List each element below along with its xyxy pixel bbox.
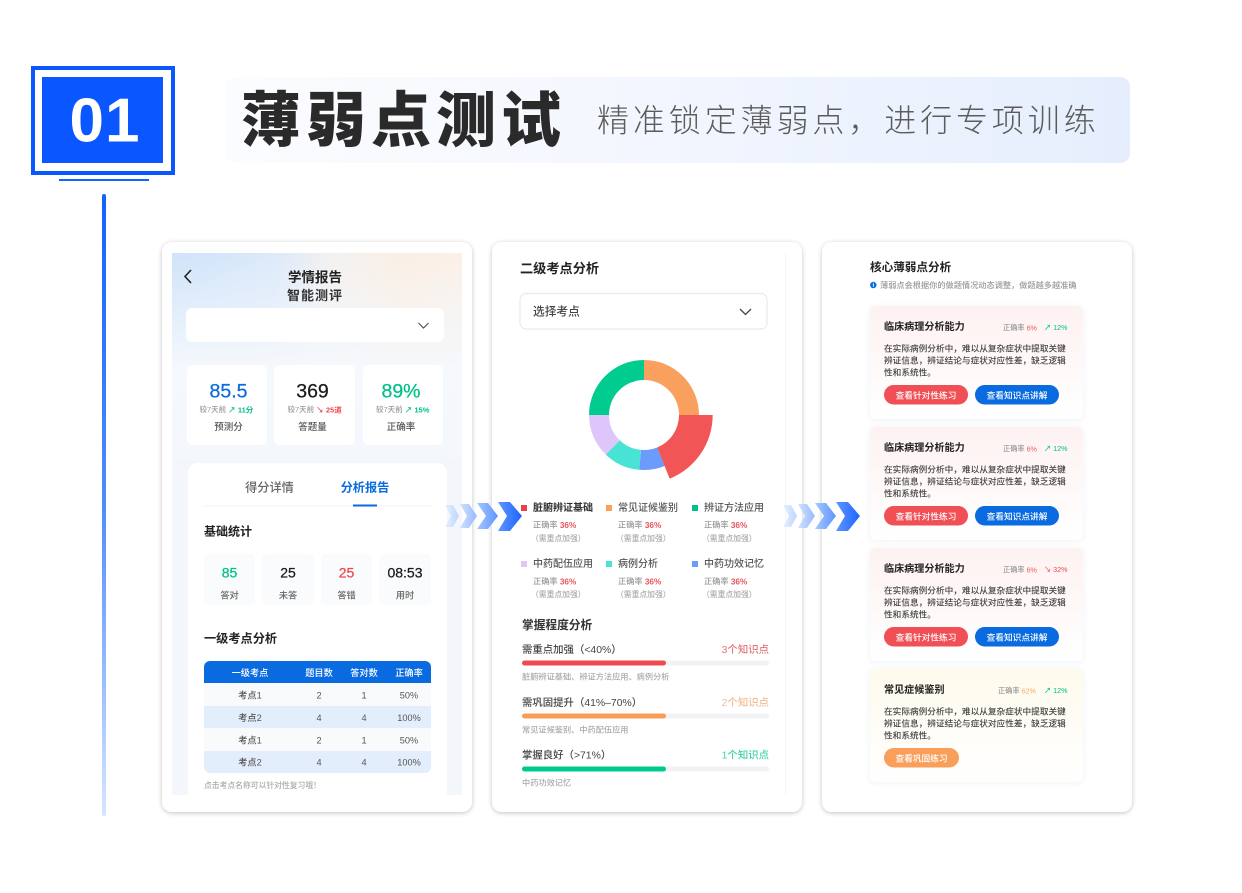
table: 50% [400,691,418,701]
weak point card 1: 在实际病例分析中，难以从复杂症状中提取关键 [884,343,1066,354]
report title [287,269,343,303]
panel: level two analysis screen [492,242,802,812]
table: 4 [361,713,367,723]
stat card: questions answered: 369 [296,381,329,403]
chart legend: 病例分析 [618,557,658,570]
weak point card 3: ↘ 32% [1044,565,1068,574]
weak point card 3: 查看针对性练习 [896,632,956,643]
chart legend: （需重点加强） [531,589,586,599]
stat card: accuracy: 较7天前 ↗ 15% [376,404,430,414]
statistic tiles: 答错 [337,590,356,601]
table: 1 [361,736,367,746]
tabs: 分析报告 [341,480,389,495]
weak point card 4: 在实际病例分析中，难以从复杂症状中提取关键 [884,706,1066,717]
table: 正确率 [395,667,423,678]
weak point card 2: 正确率 6% [1003,444,1038,453]
weak point card 1: 查看针对性练习 [896,390,956,401]
tabs [204,480,432,506]
stat card: predicted score: 较7天前 ↗ 11分 [200,404,254,414]
weak point card 3 [870,548,1083,661]
weak point card 3: 辨证信息，辨证结论与症状对应性差，缺乏逻辑 [884,597,1066,608]
stat card: questions answered [274,365,355,445]
progress: good mastery: 中药功效记忆 [522,778,571,788]
table: 题目数 [305,667,333,678]
timeline vertical line [102,194,106,816]
stat card: predicted score: 预测分 [214,421,243,433]
chart legend: 正确率 36% [704,576,748,586]
weak point card 2: ↗ 12% [1044,444,1068,453]
progress: needs consolidation [522,696,769,735]
weak point card 2: 临床病理分析能力 [884,441,965,454]
table: 4 [361,758,367,768]
progress: needs focus: 脏腑辨证基础、辨证方法应用、病例分析 [522,672,669,682]
chart legend [521,501,764,599]
arrow: first to second screen [445,502,522,531]
table: 一级考点 [232,667,268,678]
stat card: questions answered: 答题量 [298,421,327,433]
statistic tiles: 25 [280,565,296,581]
table: 考点1 [238,735,262,746]
table: 考点1 [238,690,262,701]
chart legend: 辨证方法应用 [704,501,764,514]
chart legend: 正确率 36% [704,520,748,530]
statistic tiles [204,554,431,605]
statistic tiles: 答对 [220,590,239,601]
weak point card 2: 性和系统性。 [884,488,936,499]
weak point card 1 [870,306,1083,419]
progress: needs focus [522,643,769,682]
statistic tiles: 未答 [279,590,297,601]
weak point card 4: 性和系统性。 [884,730,936,741]
weak point card 4: 正确率 62% [998,686,1037,695]
weak point card 1: 查看知识点讲解 [987,390,1048,401]
heading: level one analysis: 一级考点分析 [204,631,277,646]
number badge 01 [33,68,173,181]
stat card: questions answered: 较7天前 ↘ 25道 [288,404,342,414]
weak point card 3: 性和系统性。 [884,609,936,620]
table: 50% [400,736,418,746]
chart legend: 正确率 36% [533,576,577,586]
statistic tiles: 85 [222,565,237,581]
progress: needs focus: 需重点加强（<40%） [522,643,622,656]
heading: level two analysis: 二级考点分析 [520,260,599,276]
table: 4 [316,713,322,723]
weak point card 2: 辨证信息，辨证结论与症状对应性差，缺乏逻辑 [884,476,1066,487]
table [204,661,431,773]
statistic tiles: 用时 [396,590,414,601]
info note: 薄弱点会根据你的做题情况动态调整，做题越多越准确 [880,280,1077,290]
heading: core weak points: 核心薄弱点分析 [870,260,952,274]
chart legend: 正确率 36% [618,520,662,530]
progress: needs consolidation: 需巩固提升（41%–70%） [522,696,642,709]
chart legend: 正确率 36% [618,576,662,586]
statistic tiles: 25 [339,565,354,581]
progress: good mastery [522,749,769,788]
table: 考点2 [238,712,262,723]
weak point card 4: ↗ 12% [1044,686,1068,695]
title: 薄弱点测试 [241,88,566,154]
statistic tiles: 08:53 [387,565,423,581]
dropdown: select topic: 选择考点 [533,305,580,319]
weak point card 4 [870,669,1083,782]
weak point card 3: 正确率 6% [1003,565,1038,574]
chart legend: （需重点加强） [616,533,671,543]
progress: good mastery: 1个知识点 [722,749,769,762]
arrow: second to third screen [783,502,860,531]
chart legend: （需重点加强） [616,589,671,599]
table: 考点2 [238,757,262,768]
number badge 01: 01 [70,86,140,156]
chart legend: 正确率 36% [533,520,577,530]
icon: back chevron [185,270,191,283]
weak point card 4: 辨证信息，辨证结论与症状对应性差，缺乏逻辑 [884,718,1066,729]
table: 2 [316,736,322,746]
subtitle: 精准锁定薄弱点，进行专项训练 [597,102,1100,138]
stat card: accuracy: 正确率 [387,421,416,433]
tabs: 得分详情 [245,480,294,495]
report title: 智能测评 [287,288,343,303]
donut chart [589,360,713,479]
chart legend: （需重点加强） [531,533,586,543]
weak point card 3: 临床病理分析能力 [884,562,965,575]
stat card: predicted score: 85.5 [210,381,248,403]
weak point card 2 [870,427,1083,540]
chart legend: 中药功效记忆 [704,557,764,570]
weak point card 2: 在实际病例分析中，难以从复杂症状中提取关键 [884,464,1066,475]
weak point card 4: 常见症候鉴别 [884,683,945,696]
panel: core weak points screen [822,242,1132,812]
table: 答对数 [350,667,378,678]
header banner [225,77,1130,163]
weak point card 2: 查看针对性练习 [896,511,956,522]
chart legend: 常见证候鉴别 [618,501,678,514]
stat card: accuracy [363,365,443,445]
chart legend: 脏腑辨证基础 [533,501,593,514]
chart legend: （需重点加强） [702,589,757,599]
weak point card 1: 辨证信息，辨证结论与症状对应性差，缺乏逻辑 [884,355,1066,366]
stat card: accuracy: 89% [381,381,421,403]
weak point card 1: 正确率 6% [1003,323,1038,332]
weak point card 3: 查看知识点讲解 [987,632,1048,643]
table: 2 [316,691,322,701]
weak point card 4: 查看巩固练习 [895,753,948,764]
heading: basic statistics: 基础统计 [204,524,252,539]
chart legend: 中药配伍应用 [533,557,593,570]
table: 1 [361,691,367,701]
chart legend: （需重点加强） [702,533,757,543]
progress: needs focus: 3个知识点 [722,643,769,656]
table note: 点击考点名称可以针对性复习哦！ [204,780,321,790]
weak point card 1: ↗ 12% [1044,323,1068,332]
white detail panel [188,463,447,795]
stat card: predicted score [187,365,267,445]
dropdown [186,308,444,342]
weak point card 2: 查看知识点讲解 [987,511,1048,522]
progress: good mastery: 掌握良好（>71%） [522,749,611,762]
dropdown: select topic [520,294,767,329]
progress: needs consolidation: 常见证候鉴别、中药配伍应用 [522,725,628,735]
table: 100% [397,713,421,723]
panel: learning report screen [162,242,472,812]
report title: 学情报告 [288,269,342,285]
weak point card 1: 性和系统性。 [884,367,936,378]
weak point card 1: 临床病理分析能力 [884,320,965,333]
progress: needs consolidation: 2个知识点 [722,696,769,709]
weak point card 3: 在实际病例分析中，难以从复杂症状中提取关键 [884,585,1066,596]
table: 100% [397,758,421,768]
heading: mastery analysis: 掌握程度分析 [522,618,592,632]
table: 4 [316,758,322,768]
